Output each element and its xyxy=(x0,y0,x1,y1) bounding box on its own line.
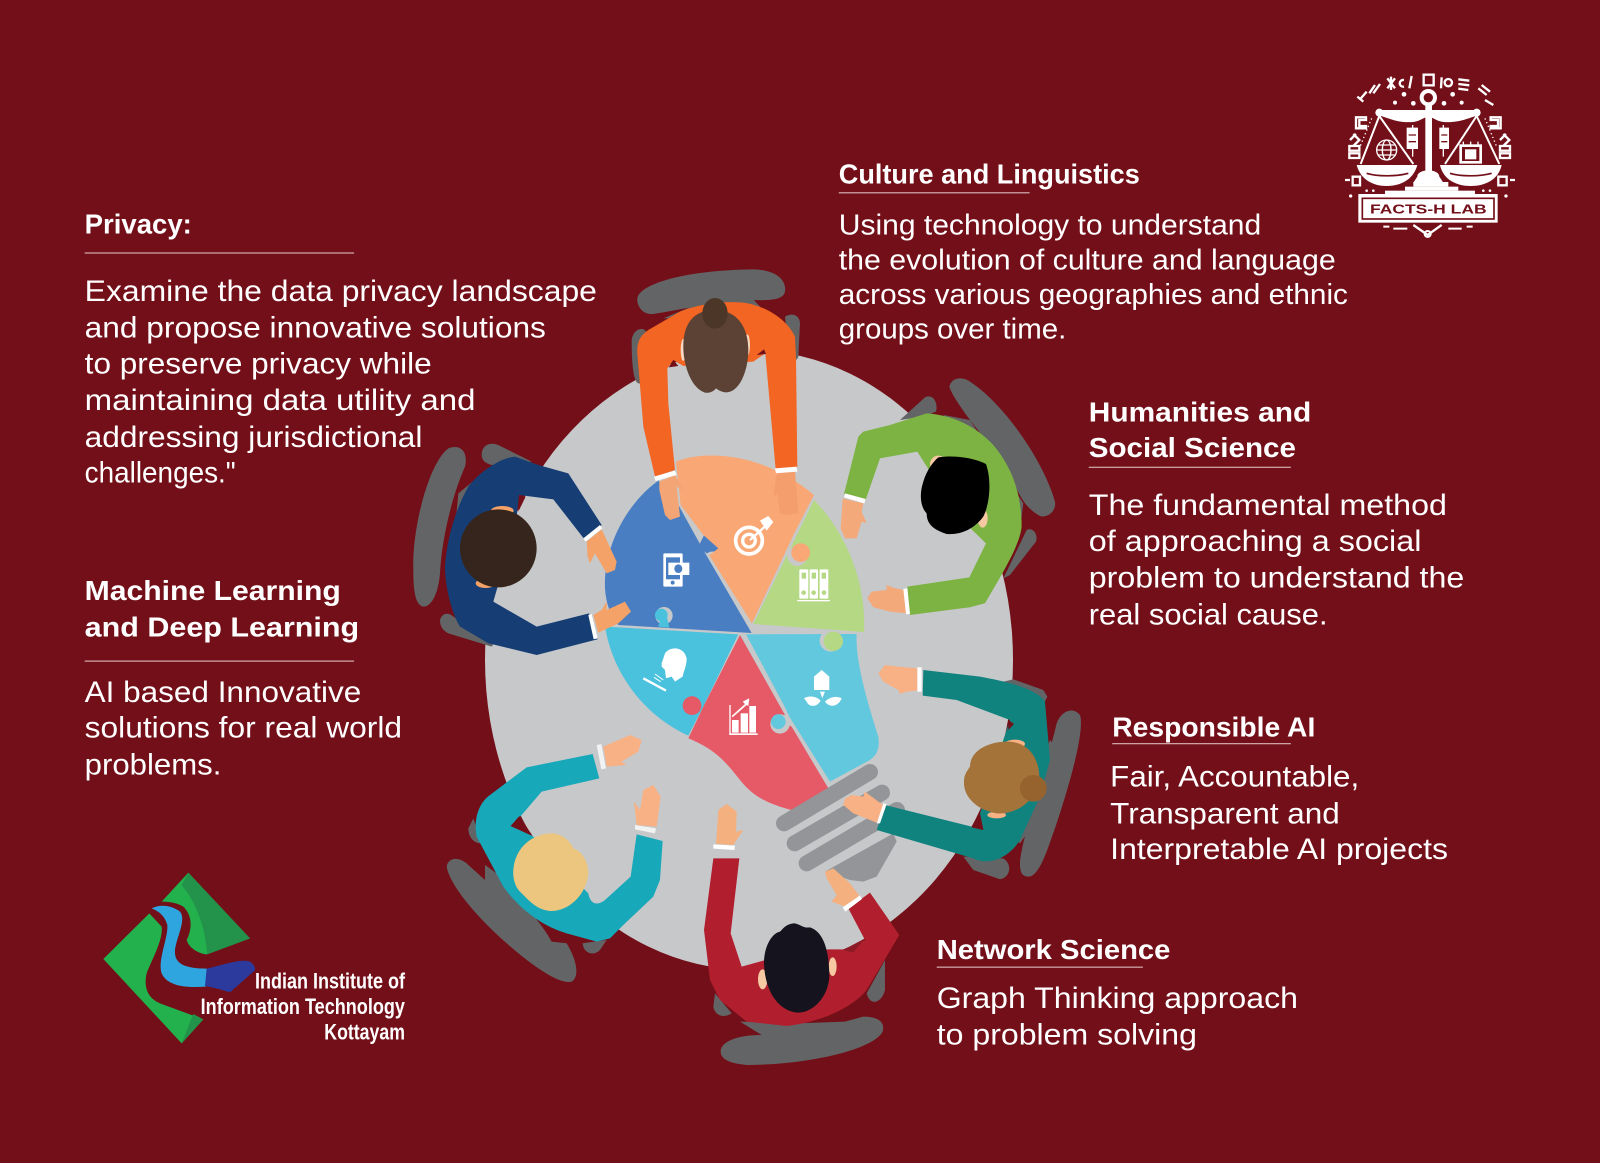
heading: and Deep Learning xyxy=(85,612,359,643)
person: orange, top xyxy=(632,269,800,520)
puzzle piece: green xyxy=(753,500,864,632)
hands xyxy=(587,529,631,633)
heading: Network Science xyxy=(937,934,1170,965)
cuffs xyxy=(877,667,922,823)
body text xyxy=(839,210,1348,346)
body text xyxy=(1110,761,1448,866)
chair xyxy=(447,818,607,982)
body text xyxy=(1089,489,1464,631)
panel: humanities and social science xyxy=(1089,396,1464,631)
body text: The fundamental method xyxy=(1089,489,1447,522)
chair xyxy=(713,960,885,1065)
cuffs xyxy=(713,844,862,912)
heading: Culture and Linguistics xyxy=(839,159,1140,190)
logo: IIIT Kottayam xyxy=(103,873,406,1044)
logo name plate xyxy=(1358,194,1498,237)
head xyxy=(964,740,1047,818)
arms and shoulders xyxy=(844,413,1022,615)
body text: challenges." xyxy=(85,457,236,490)
chair xyxy=(963,679,1081,879)
text: all content blocks xyxy=(85,159,1464,1052)
body text: and propose innovative solutions xyxy=(85,312,546,345)
body text: problems. xyxy=(85,748,221,781)
body text: maintaining data utility and xyxy=(85,384,476,417)
icon: envelope with wings xyxy=(804,670,842,706)
body text: problem to understand the xyxy=(1089,562,1464,595)
head xyxy=(921,456,989,534)
body text: of approaching a social xyxy=(1089,525,1421,558)
institute name: Information Technology xyxy=(201,994,406,1019)
cuffs xyxy=(597,744,656,833)
panel: culture and linguistics xyxy=(839,159,1348,346)
head xyxy=(513,833,588,911)
body text: Interpretable AI projects xyxy=(1110,833,1448,866)
panel: machine learning xyxy=(85,575,402,781)
head xyxy=(758,923,837,1013)
body text: across various geographies and ethnic xyxy=(839,279,1348,311)
panel: privacy xyxy=(85,209,597,490)
body text: Transparent and xyxy=(1110,797,1340,830)
left pan xyxy=(1357,116,1417,186)
body text: to problem solving xyxy=(937,1019,1197,1052)
head xyxy=(460,506,537,588)
puzzle piece: light blue xyxy=(605,607,738,736)
arms and shoulders xyxy=(637,302,797,477)
panel: responsible ai xyxy=(1110,712,1448,866)
hands xyxy=(659,472,798,520)
right pan xyxy=(1440,116,1502,186)
body text: groups over time. xyxy=(839,314,1066,346)
icon: binders xyxy=(797,569,830,601)
body text: Using technology to understand xyxy=(839,210,1261,242)
puzzle piece: red xyxy=(683,635,828,811)
hands xyxy=(843,665,917,823)
body text xyxy=(85,275,597,490)
heading: Social Science xyxy=(1089,432,1296,463)
body text xyxy=(937,982,1298,1052)
body text: to preserve privacy while xyxy=(85,347,432,380)
body text: AI based Innovative xyxy=(85,676,361,709)
heading xyxy=(85,575,359,643)
person: navy, left xyxy=(413,444,631,655)
body text: Fair, Accountable, xyxy=(1110,761,1359,794)
head xyxy=(681,298,750,393)
puzzle piece: blue xyxy=(605,481,752,633)
hands xyxy=(841,498,906,613)
person: red, bottom xyxy=(704,804,899,1065)
cuffs xyxy=(583,525,602,639)
person: green, upper right xyxy=(841,378,1055,615)
table xyxy=(485,350,1013,970)
arms and shoulders xyxy=(476,754,663,942)
cuffs xyxy=(654,467,797,481)
scale post and ring xyxy=(1375,91,1481,195)
heading: Responsible AI xyxy=(1112,712,1315,743)
body text: the evolution of culture and language xyxy=(839,244,1336,276)
arms and shoulders xyxy=(877,670,1050,861)
body text: Examine the data privacy landscape xyxy=(85,275,597,308)
body text: Graph Thinking approach xyxy=(937,982,1298,1015)
icon: target with arrow xyxy=(736,516,773,554)
icon: head and keyboard xyxy=(643,648,687,691)
hands xyxy=(603,735,661,827)
puzzle piece: peach xyxy=(676,455,814,623)
heading: Machine Learning xyxy=(85,575,341,606)
decorative glyph ring xyxy=(1345,75,1515,198)
logo: FACTS-H Lab xyxy=(1345,75,1515,237)
puzzle bulb xyxy=(605,455,879,811)
institute name: Indian Institute of xyxy=(255,968,406,993)
chair xyxy=(632,269,800,383)
body text: real social cause. xyxy=(1089,598,1328,631)
arms and shoulders xyxy=(445,457,602,655)
hands xyxy=(716,804,860,907)
arms and shoulders xyxy=(704,858,899,1026)
heading: Privacy: xyxy=(85,209,192,240)
keyboard xyxy=(784,772,897,882)
institute name: Kottayam xyxy=(324,1019,405,1044)
heading: Humanities and xyxy=(1089,396,1311,427)
panel: network science xyxy=(937,934,1298,1052)
illustration: round table meeting xyxy=(413,269,1081,1065)
body text: addressing jurisdictional xyxy=(85,421,422,454)
diamond mark xyxy=(103,873,255,1043)
logo name plate: FACTS-H LAB xyxy=(1370,202,1487,216)
cuffs xyxy=(844,493,910,614)
body text: solutions for real world xyxy=(85,712,402,745)
institute name xyxy=(201,968,406,1044)
body text xyxy=(85,676,402,781)
icon: mobile money xyxy=(663,553,689,587)
heading xyxy=(1089,396,1311,463)
person: teal, lower left xyxy=(447,735,663,982)
puzzle piece: cyan xyxy=(746,630,879,782)
icon: growth chart xyxy=(729,698,758,735)
chair xyxy=(413,444,532,647)
person: dark teal, right xyxy=(843,665,1081,879)
chair xyxy=(900,378,1055,578)
